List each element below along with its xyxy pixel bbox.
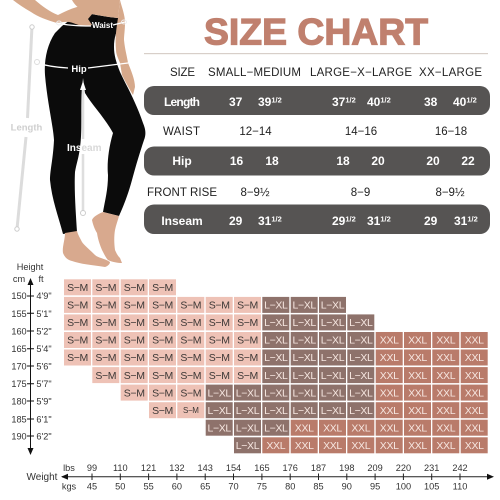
weight labels: lbs: 154 bbox=[226, 463, 241, 473]
grid row 150 cm: S−M bbox=[95, 282, 116, 294]
grid row 180 cm: XXL bbox=[380, 387, 399, 399]
grid row 180 cm: L−XL bbox=[264, 387, 288, 399]
grid row 175 cm: S−M bbox=[237, 370, 258, 382]
grid row 190 cm: L−XL bbox=[264, 422, 288, 434]
height axis: ft bbox=[38, 274, 44, 284]
title: SIZE CHART bbox=[204, 12, 428, 52]
row: front rise: 8−9 bbox=[351, 187, 370, 199]
height axis: 5'9" bbox=[36, 396, 52, 406]
row: length bbox=[144, 86, 490, 115]
black leggings bbox=[45, 12, 145, 234]
grid row 180 cm: XXL bbox=[465, 387, 484, 399]
grid row 180 cm: L−XL bbox=[292, 387, 316, 399]
grid row 190 cm: XXL bbox=[408, 422, 427, 434]
grid row bottom: L−XL bbox=[236, 440, 260, 452]
weight labels: kgs: 45 bbox=[87, 482, 97, 492]
weight labels: kgs: 65 bbox=[200, 482, 210, 492]
row: length: 38 bbox=[424, 95, 438, 109]
grid row 170 cm: S−M bbox=[95, 352, 116, 364]
grid row 155 cm: S−M bbox=[95, 300, 116, 312]
weight labels: lbs: lbs bbox=[63, 463, 75, 473]
weight labels: kgs: 50 bbox=[115, 482, 125, 492]
grid row 180 cm: L−XL bbox=[321, 387, 345, 399]
grid row 175 cm: XXL bbox=[408, 370, 427, 382]
grid row 180 cm: XXL bbox=[408, 387, 427, 399]
grid row 170 cm: XXL bbox=[465, 352, 484, 364]
height axis: 160 bbox=[11, 326, 27, 336]
grid row 170 cm: XXL bbox=[436, 352, 456, 364]
row: inseam: 1/2 bbox=[271, 214, 282, 224]
length measure bbox=[11, 25, 43, 231]
grid row 165 cm: L−XL bbox=[321, 335, 345, 347]
height axis: 6'2" bbox=[36, 432, 52, 442]
grid row 185 cm: S−M bbox=[183, 406, 199, 415]
height axis: 5'4" bbox=[36, 344, 52, 354]
grid row 160 cm bbox=[64, 314, 374, 330]
grid row 175 cm: XXL bbox=[465, 370, 484, 382]
grid row 155 cm: L−XL bbox=[321, 300, 345, 312]
grid row 170 cm: L−XL bbox=[321, 352, 345, 364]
waist measure bbox=[56, 20, 126, 30]
row: length: 1/2 bbox=[466, 96, 477, 104]
grid row 160 cm: L−XL bbox=[321, 317, 345, 329]
grid row 165 cm: L−XL bbox=[292, 335, 316, 347]
weight labels: lbs: 242 bbox=[452, 463, 468, 473]
grid row 165 cm: S−M bbox=[237, 335, 258, 347]
grid row 170 cm: L−XL bbox=[264, 352, 288, 364]
row: inseam bbox=[144, 204, 490, 234]
grid row 190 cm: XXL bbox=[295, 422, 314, 434]
grid row 155 cm: S−M bbox=[124, 300, 145, 312]
weight labels: lbs bbox=[63, 463, 468, 473]
row: length: 37 bbox=[229, 95, 243, 109]
grid row 155 cm: S−M bbox=[67, 300, 88, 312]
row: hip bbox=[144, 146, 490, 176]
grid row 170 cm: S−M bbox=[67, 352, 88, 364]
row: hip: 16 bbox=[230, 154, 243, 168]
leggings photo bbox=[11, 0, 145, 267]
grid row 165 cm: S−M bbox=[180, 335, 201, 347]
weight axis bbox=[27, 463, 494, 492]
grid row 160 cm: L−XL bbox=[349, 317, 373, 329]
grid row 165 cm: XXL bbox=[408, 335, 427, 347]
height axis: 185 bbox=[11, 414, 27, 424]
grid row 185 cm: XXL bbox=[465, 405, 484, 417]
grid row 175 cm: S−M bbox=[180, 370, 201, 382]
grid row 150 cm: S−M bbox=[152, 282, 173, 294]
size table bbox=[144, 67, 490, 234]
row: inseam: 1/2 bbox=[380, 214, 391, 224]
grid row 160 cm: S−M bbox=[124, 317, 145, 329]
weight labels: lbs: 209 bbox=[367, 463, 383, 473]
grid row 170 cm: S−M bbox=[180, 352, 201, 364]
grid row 185 cm: XXL bbox=[380, 405, 399, 417]
row: waist: WAIST bbox=[163, 126, 200, 138]
grid row bottom: XXL bbox=[266, 440, 286, 452]
grid row 185 cm: L−XL bbox=[207, 405, 231, 417]
row: inseam: 31 bbox=[367, 214, 380, 228]
row: length: 1/2 bbox=[380, 96, 391, 104]
grid row 185 cm: L−XL bbox=[264, 405, 288, 417]
grid row 170 cm bbox=[64, 350, 488, 366]
grid row 160 cm: S−M bbox=[67, 317, 88, 329]
weight labels: kgs: 75 bbox=[257, 482, 267, 492]
grid row 170 cm: S−M bbox=[209, 352, 230, 364]
grid row 150 cm: S−M bbox=[124, 282, 145, 294]
size grid bbox=[64, 279, 488, 453]
weight labels: kgs: 105 bbox=[424, 482, 439, 492]
grid row 175 cm: S−M bbox=[124, 370, 145, 382]
grid row 155 cm: S−M bbox=[237, 300, 258, 312]
row: length: 1/2 bbox=[271, 96, 282, 104]
row: inseam: 31 bbox=[454, 214, 467, 228]
grid row 185 cm: XXL bbox=[408, 405, 427, 417]
grid row bottom: XXL bbox=[380, 440, 399, 452]
grid row 170 cm: S−M bbox=[124, 352, 145, 364]
hip measure: Hip bbox=[71, 64, 87, 75]
table header: SMALL−MEDIUM bbox=[208, 67, 301, 79]
grid row 155 cm bbox=[64, 297, 346, 313]
grid row 180 cm: S−M bbox=[124, 387, 145, 399]
row: length: 37 bbox=[332, 95, 345, 109]
height axis: 150 bbox=[11, 291, 27, 301]
grid row 155 cm: L−XL bbox=[292, 300, 316, 312]
height axis: 5'1" bbox=[36, 309, 52, 319]
grid row 150 cm bbox=[64, 279, 176, 295]
weight labels: lbs: 143 bbox=[198, 463, 213, 473]
row: front rise bbox=[147, 187, 465, 199]
grid row 155 cm: S−M bbox=[152, 300, 173, 312]
row: hip: 20 bbox=[371, 154, 385, 168]
height axis: 165 bbox=[11, 344, 27, 354]
grid row 190 cm bbox=[206, 420, 488, 436]
grid row 165 cm: S−M bbox=[95, 335, 116, 347]
grid row 165 cm: L−XL bbox=[264, 335, 288, 347]
grid row 175 cm: S−M bbox=[95, 370, 116, 382]
grid row 175 cm: L−XL bbox=[321, 370, 345, 382]
grid row 160 cm: S−M bbox=[152, 317, 173, 329]
row: hip: 18 bbox=[265, 154, 279, 168]
weight labels: kgs: 100 bbox=[396, 482, 411, 492]
grid row bottom: XXL bbox=[351, 440, 371, 452]
grid row 170 cm: S−M bbox=[237, 352, 258, 364]
grid row 185 cm: L−XL bbox=[349, 405, 373, 417]
row: front rise: 8−9½ bbox=[435, 187, 465, 199]
grid row bottom: XXL bbox=[465, 440, 484, 452]
height axis: 5'2" bbox=[36, 326, 52, 336]
grid row 190 cm: XXL bbox=[436, 422, 456, 434]
grid row 160 cm: S−M bbox=[209, 317, 230, 329]
height axis: 5'6" bbox=[36, 362, 52, 372]
grid row 175 cm: L−XL bbox=[264, 370, 288, 382]
grid row 190 cm: L−XL bbox=[207, 422, 231, 434]
waist measure: Waist bbox=[92, 21, 113, 30]
row: hip: 20 bbox=[426, 154, 440, 168]
row: length: 40 bbox=[453, 95, 466, 109]
height axis: 6'1" bbox=[36, 414, 52, 424]
grid row 170 cm: L−XL bbox=[292, 352, 316, 364]
height axis: cm bbox=[13, 274, 25, 284]
grid row 180 cm: S−M bbox=[180, 387, 201, 399]
grid row 165 cm: XXL bbox=[380, 335, 399, 347]
grid row 185 cm: XXL bbox=[436, 405, 456, 417]
weight labels: kgs: 70 bbox=[228, 482, 239, 492]
grid row bottom: XXL bbox=[323, 440, 342, 452]
table header bbox=[170, 67, 482, 79]
grid row 185 cm: L−XL bbox=[292, 405, 316, 417]
grid row 175 cm: XXL bbox=[436, 370, 456, 382]
model skin: feet bbox=[63, 212, 122, 267]
model skin: torso and arms bbox=[13, 0, 135, 95]
row: length: 39 bbox=[258, 95, 271, 109]
row: inseam: 29 bbox=[229, 214, 243, 228]
grid row 155 cm: S−M bbox=[180, 300, 201, 312]
grid row 160 cm: L−XL bbox=[264, 317, 288, 329]
weight labels: lbs: 187 bbox=[311, 463, 326, 473]
height axis: 170 bbox=[11, 362, 27, 372]
row: length: 40 bbox=[367, 95, 380, 109]
grid row 160 cm: S−M bbox=[237, 317, 258, 329]
grid row 185 cm: L−XL bbox=[321, 405, 345, 417]
grid row 180 cm: L−XL bbox=[349, 387, 373, 399]
grid row 170 cm: L−XL bbox=[349, 352, 373, 364]
row: length: Length bbox=[164, 95, 200, 109]
row: waist: 14−16 bbox=[345, 126, 377, 138]
grid row 180 cm: S−M bbox=[152, 387, 173, 399]
weight labels: lbs: 176 bbox=[283, 463, 298, 473]
table header: LARGE−X−LARGE bbox=[310, 67, 412, 79]
height axis: 5'7" bbox=[36, 379, 52, 389]
weight labels: kgs: 95 bbox=[370, 482, 380, 492]
weight axis: Weight bbox=[27, 472, 58, 483]
weight labels: lbs: 110 bbox=[113, 463, 128, 473]
grid row 170 cm: S−M bbox=[152, 352, 173, 364]
grid row 175 cm bbox=[92, 367, 488, 383]
row: front rise: FRONT RISE bbox=[147, 187, 217, 199]
hip measure bbox=[34, 60, 128, 75]
row: waist: 16−18 bbox=[435, 126, 467, 138]
weight labels: lbs: 220 bbox=[396, 463, 411, 473]
grid row 185 cm: L−XL bbox=[236, 405, 260, 417]
grid row 165 cm: XXL bbox=[465, 335, 484, 347]
row: hip: Hip bbox=[172, 154, 192, 168]
weight labels: kgs: 85 bbox=[313, 482, 324, 492]
row: front rise: 8−9½ bbox=[240, 187, 270, 199]
weight labels: lbs: 231 bbox=[424, 463, 439, 473]
grid row bottom: XXL bbox=[408, 440, 427, 452]
grid row 185 cm bbox=[149, 402, 488, 418]
table header: XX−LARGE bbox=[419, 67, 482, 79]
height axis: 155 bbox=[11, 309, 27, 319]
table header: SIZE bbox=[170, 67, 195, 79]
grid row 160 cm: S−M bbox=[95, 317, 116, 329]
grid row 155 cm: S−M bbox=[209, 300, 230, 312]
row: length: 1/2 bbox=[345, 96, 356, 104]
grid row 170 cm: XXL bbox=[408, 352, 427, 364]
height axis: 180 bbox=[11, 396, 27, 406]
row: inseam: 29 bbox=[332, 214, 345, 228]
grid row bottom: XXL bbox=[295, 440, 314, 452]
weight labels: lbs: 132 bbox=[169, 463, 185, 473]
row: hip: 18 bbox=[336, 154, 350, 168]
height axis: 190 bbox=[11, 432, 27, 442]
height axis bbox=[11, 262, 52, 455]
grid row 190 cm: XXL bbox=[465, 422, 484, 434]
weight labels: kgs: kgs bbox=[62, 482, 77, 492]
weight labels: kgs: 60 bbox=[172, 482, 182, 492]
grid row 175 cm: S−M bbox=[152, 370, 173, 382]
grid row 155 cm: L−XL bbox=[264, 300, 288, 312]
grid row 180 cm: XXL bbox=[436, 387, 456, 399]
inseam measure: Inseam bbox=[67, 143, 102, 154]
weight labels: lbs: 121 bbox=[141, 463, 156, 473]
grid row 180 cm bbox=[121, 385, 488, 401]
weight labels: kgs: 80 bbox=[285, 482, 295, 492]
length measure: Length bbox=[11, 122, 43, 134]
weight labels: lbs: 99 bbox=[87, 463, 97, 473]
row: inseam: 31 bbox=[258, 214, 271, 228]
row: inseam: 1/2 bbox=[345, 214, 356, 224]
grid row 180 cm: L−XL bbox=[236, 387, 260, 399]
height axis: 4'9" bbox=[36, 291, 52, 301]
weight labels: lbs: 198 bbox=[339, 463, 354, 473]
grid row 165 cm bbox=[64, 332, 488, 348]
grid row 150 cm: S−M bbox=[67, 282, 88, 294]
grid row 190 cm: XXL bbox=[380, 422, 399, 434]
grid row 190 cm: L−XL bbox=[236, 422, 260, 434]
grid row 175 cm: XXL bbox=[380, 370, 399, 382]
row: inseam: 29 bbox=[424, 214, 438, 228]
grid row 175 cm: L−XL bbox=[292, 370, 316, 382]
grid row 165 cm: S−M bbox=[152, 335, 173, 347]
grid row 190 cm: XXL bbox=[351, 422, 371, 434]
grid row 165 cm: XXL bbox=[436, 335, 456, 347]
row: inseam: Inseam bbox=[161, 214, 203, 228]
row: hip: 22 bbox=[461, 154, 475, 168]
inseam measure bbox=[67, 81, 102, 216]
grid row 160 cm: S−M bbox=[180, 317, 201, 329]
grid row 180 cm: L−XL bbox=[207, 387, 231, 399]
row: waist bbox=[163, 126, 467, 138]
grid row 160 cm: L−XL bbox=[292, 317, 316, 329]
weight labels: kgs: 90 bbox=[342, 482, 352, 492]
grid row 165 cm: S−M bbox=[124, 335, 145, 347]
grid row 170 cm: XXL bbox=[380, 352, 399, 364]
weight labels: kgs: 110 bbox=[453, 482, 467, 492]
grid row 165 cm: S−M bbox=[67, 335, 88, 347]
row: waist: 12−14 bbox=[239, 126, 272, 138]
grid row 165 cm: S−M bbox=[209, 335, 230, 347]
weight labels: kgs: 55 bbox=[143, 482, 154, 492]
row: inseam: 1/2 bbox=[467, 214, 478, 224]
grid row 175 cm: S−M bbox=[209, 370, 230, 382]
grid row 190 cm: XXL bbox=[323, 422, 342, 434]
height axis: 175 bbox=[11, 379, 27, 389]
grid row 175 cm: L−XL bbox=[349, 370, 373, 382]
grid row 165 cm: L−XL bbox=[349, 335, 373, 347]
weight labels: kgs bbox=[62, 482, 467, 492]
grid row 185 cm: S−M bbox=[152, 405, 173, 417]
weight labels: lbs: 165 bbox=[254, 463, 270, 473]
grid row bottom: XXL bbox=[436, 440, 456, 452]
height axis: Height bbox=[17, 262, 44, 272]
grid row bottom bbox=[234, 437, 488, 453]
